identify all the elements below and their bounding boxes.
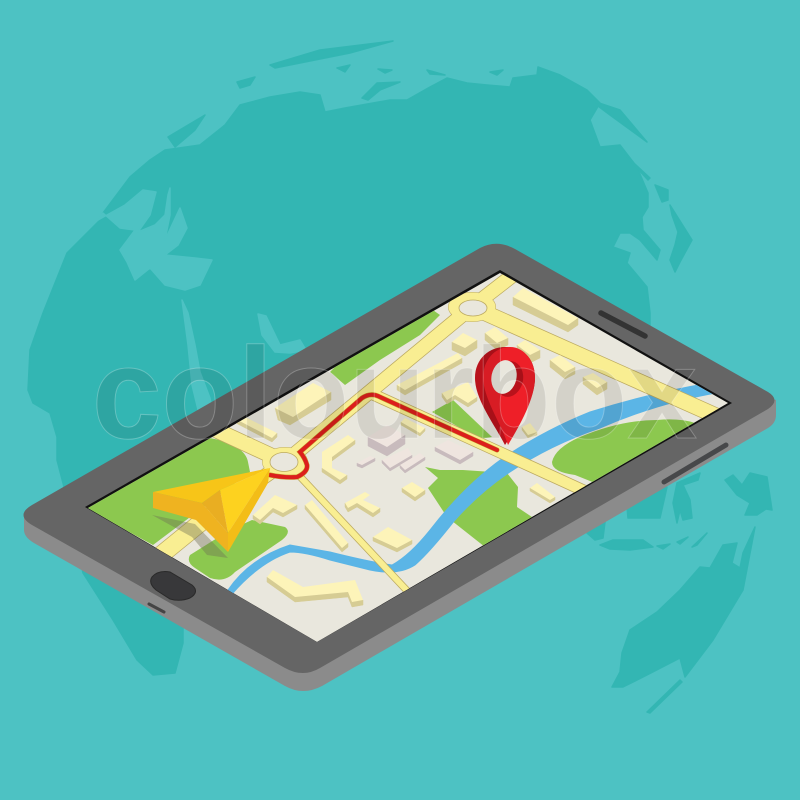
building: behind pin bbox=[522, 423, 537, 438]
roundabout: upper bbox=[448, 292, 496, 322]
building: T shape bbox=[345, 492, 380, 517]
arrow: top left face bbox=[153, 468, 270, 503]
sea: Red Sea bbox=[182, 300, 213, 418]
arrow shadow bbox=[152, 515, 228, 558]
road: left spur bbox=[213, 428, 275, 460]
sea: Persian Gulf bbox=[258, 314, 306, 353]
building: cube two bbox=[485, 327, 508, 350]
home button bbox=[151, 572, 196, 600]
sea: Mediterranean bbox=[98, 188, 212, 290]
building: angled near arrow bbox=[253, 495, 297, 524]
road: thin road outline bbox=[298, 476, 410, 592]
road: lower avenue bbox=[371, 392, 586, 492]
pin: hole bbox=[488, 358, 520, 396]
building: long upper bbox=[397, 353, 462, 395]
roundabout outlines bbox=[262, 292, 496, 477]
park: river bank bbox=[425, 467, 532, 547]
building: long diagonal bbox=[305, 500, 348, 552]
tablet bbox=[24, 244, 776, 691]
building: large block bbox=[275, 383, 331, 425]
arctic islands bbox=[168, 41, 503, 147]
pacific islands bbox=[590, 100, 692, 272]
river bbox=[228, 383, 722, 594]
park: small bbox=[432, 400, 492, 439]
building: top right long bbox=[513, 288, 578, 332]
world map globe bbox=[28, 41, 772, 713]
island: camel shaped bbox=[725, 473, 772, 515]
arrow: inner facet bbox=[202, 490, 228, 533]
watermark: colourbox bbox=[92, 320, 697, 466]
continent: Eurasia and Africa bbox=[28, 67, 660, 675]
pin: dark body bbox=[475, 347, 535, 445]
building: pink stepped bbox=[357, 456, 375, 468]
navigation arrow bbox=[153, 468, 270, 552]
building: rectangular lower bbox=[373, 527, 412, 552]
screen edge bbox=[85, 270, 732, 642]
building: lower right strip bbox=[530, 483, 555, 503]
pin: front face bbox=[483, 347, 535, 445]
road: left spur outline bbox=[212, 428, 275, 460]
tablet face bbox=[24, 244, 774, 673]
tablet side edge bbox=[24, 300, 776, 691]
island: Tasmania bbox=[647, 680, 682, 713]
map ground bbox=[85, 270, 732, 642]
road: main road outline bbox=[156, 518, 206, 558]
map screen bbox=[85, 262, 732, 642]
building: rectangular middle bbox=[402, 482, 425, 501]
inland seas bbox=[98, 188, 306, 418]
roads bbox=[140, 262, 730, 596]
building: cube one bbox=[452, 333, 477, 356]
building: cube four bbox=[550, 355, 575, 379]
bottom port bbox=[149, 604, 164, 612]
building: cube three bbox=[517, 340, 540, 363]
islands: Indonesia bbox=[600, 533, 707, 550]
building: stepped bbox=[442, 382, 477, 407]
park: right bbox=[552, 419, 695, 485]
road: upper diagonal bbox=[210, 262, 530, 515]
building: pink tall block bbox=[368, 435, 406, 456]
location pin bbox=[475, 347, 535, 445]
park: left bbox=[85, 438, 250, 545]
building: L shape bbox=[322, 435, 355, 484]
road: thin road bbox=[296, 473, 409, 592]
roundabout: lower bbox=[262, 448, 305, 475]
building: small strip bbox=[401, 418, 425, 436]
road: main road bbox=[156, 519, 206, 557]
park: top bbox=[330, 308, 440, 385]
speaker bbox=[601, 313, 645, 336]
building: cube five bbox=[583, 373, 607, 395]
buildings bbox=[232, 288, 607, 607]
route line bbox=[270, 395, 497, 477]
arrow: right face bbox=[220, 468, 270, 533]
arrow: left side bbox=[153, 492, 228, 552]
building: bottom large bbox=[267, 570, 363, 607]
road: right avenue bbox=[482, 309, 718, 418]
building: pink wide bbox=[435, 440, 473, 464]
continent: Australia bbox=[612, 527, 755, 687]
road: lower avenue outline bbox=[370, 393, 600, 498]
building: long left bbox=[236, 418, 278, 442]
arrow: right edge bbox=[228, 468, 270, 552]
road: right avenue outline bbox=[482, 308, 720, 418]
road: upper diagonal outline bbox=[210, 262, 530, 515]
land: South-East Asia bbox=[587, 473, 700, 540]
building: pink low block bbox=[382, 455, 412, 472]
pin: inner shadow bbox=[492, 358, 526, 400]
park: lower bbox=[189, 520, 288, 580]
building: pink small block bbox=[400, 457, 426, 473]
side buttons bbox=[664, 445, 726, 482]
